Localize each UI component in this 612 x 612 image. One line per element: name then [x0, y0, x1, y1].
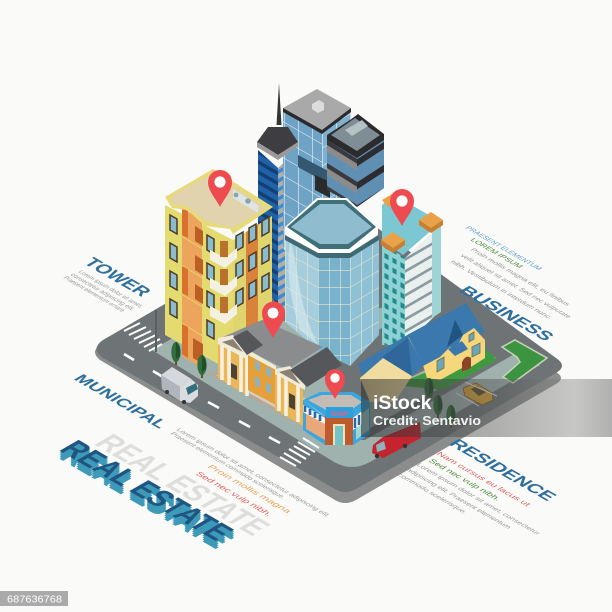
- dark tower: [257, 83, 384, 320]
- dark roofs: [233, 330, 263, 355]
- roof: [165, 169, 273, 234]
- shop: [303, 392, 370, 445]
- label: municipal: Praesent elementum commodo scelerisque.: [168, 431, 287, 500]
- windows: [170, 215, 177, 234]
- label: municipal: MUNICIPAL: [70, 372, 171, 431]
- crosswalk bottom: [280, 438, 319, 466]
- label: residence: adipiscing elit. Praesent elementum: [404, 467, 513, 530]
- label: tower: TOWER: [80, 255, 156, 299]
- teal tower: [381, 194, 443, 345]
- label: business: Proin mollis magna elit, eu finibus: [468, 247, 572, 307]
- shrubs: [171, 342, 207, 378]
- label: business: velit aliquet sit amet. Sed nec vulputate: [458, 253, 573, 320]
- lawn: [395, 350, 497, 390]
- label: municipal: [70, 372, 332, 519]
- house walls: [423, 340, 485, 380]
- map pin: shop: [325, 369, 345, 399]
- label: tower: [61, 255, 156, 313]
- city base platform: [95, 206, 562, 503]
- map pin: municipal: [262, 302, 285, 338]
- street lamp: [155, 310, 157, 352]
- parking lines: [456, 382, 497, 406]
- stock id tag: [0, 591, 68, 606]
- road dashes: [124, 354, 280, 443]
- watermark band: Credit: Sentavio: [373, 414, 481, 428]
- real estate 3D title: REAL ESTATE: [52, 443, 242, 553]
- left wing: [360, 358, 412, 402]
- label: residence: commodo scelerisque.: [395, 472, 469, 515]
- crosswalk top: [124, 323, 162, 351]
- label: business: [448, 225, 573, 344]
- house: [358, 303, 547, 428]
- label: business: LOREM IPSUM: [468, 237, 524, 270]
- label: residence: Lorem ipsum dolor sit amet, consectetur: [414, 462, 542, 537]
- label: municipal: Proin mollis magna: [205, 463, 294, 515]
- map pin: yellow tower: [208, 170, 232, 207]
- map pin: business tower: [390, 189, 414, 226]
- label: residence: [395, 436, 561, 537]
- blue roof: [358, 303, 485, 376]
- left portico: [218, 340, 248, 396]
- real estate shadow title: REAL ESTATE: [87, 429, 278, 540]
- octagonal roof: [285, 198, 378, 253]
- real estate 3D title: REAL ESTATE: [52, 439, 242, 549]
- real estate 3D title: REAL ESTATE: [52, 441, 242, 551]
- label: residence: RESIDENCE: [445, 436, 561, 504]
- center block: [283, 108, 322, 250]
- balconies: [210, 248, 237, 324]
- sidewalk: [152, 300, 540, 467]
- right portico: [275, 370, 303, 426]
- green parking island: [502, 340, 547, 383]
- label: business: PRAESENT ELEMENTUM: [463, 225, 543, 272]
- spire: [276, 83, 282, 125]
- parked car: [463, 383, 493, 405]
- watermark band: [361, 379, 612, 437]
- municipal building: [207, 320, 342, 427]
- glass tower: [285, 198, 379, 366]
- label: tower: Praesent elementum ornare: [61, 275, 126, 313]
- shop sign: SHOP: [331, 412, 348, 418]
- watermark band: iStock: [373, 392, 432, 414]
- label: tower: Lorem ipsum dolor sit amet,: [76, 269, 145, 309]
- label: business: nibh. Vestibulum in interdum nunc.: [448, 259, 554, 321]
- label: municipal: Lorem ipsum dolor sit amet, consectetur adipiscing elit.: [174, 427, 332, 519]
- label: municipal: Sed nec vulp nibh.: [193, 470, 275, 518]
- right block: [327, 138, 357, 207]
- central wing: [248, 353, 276, 405]
- trees: [424, 378, 434, 401]
- label: tower: consectetur adipiscing elit.: [68, 272, 137, 312]
- truck: [161, 367, 198, 404]
- stock id tag: 687636768: [7, 594, 62, 606]
- center roof: [283, 89, 351, 130]
- label: business: BUSINESS: [455, 283, 558, 344]
- yellow tower: [165, 169, 273, 372]
- real estate 3D title: REAL ESTATE: [52, 435, 242, 545]
- van: [372, 422, 421, 458]
- label: residence: Nam cursus eu lacus ut: [434, 450, 534, 508]
- real estate 3D title: REAL ESTATE: [52, 437, 242, 547]
- label: residence: Sed nec vulp nibh.: [426, 457, 503, 502]
